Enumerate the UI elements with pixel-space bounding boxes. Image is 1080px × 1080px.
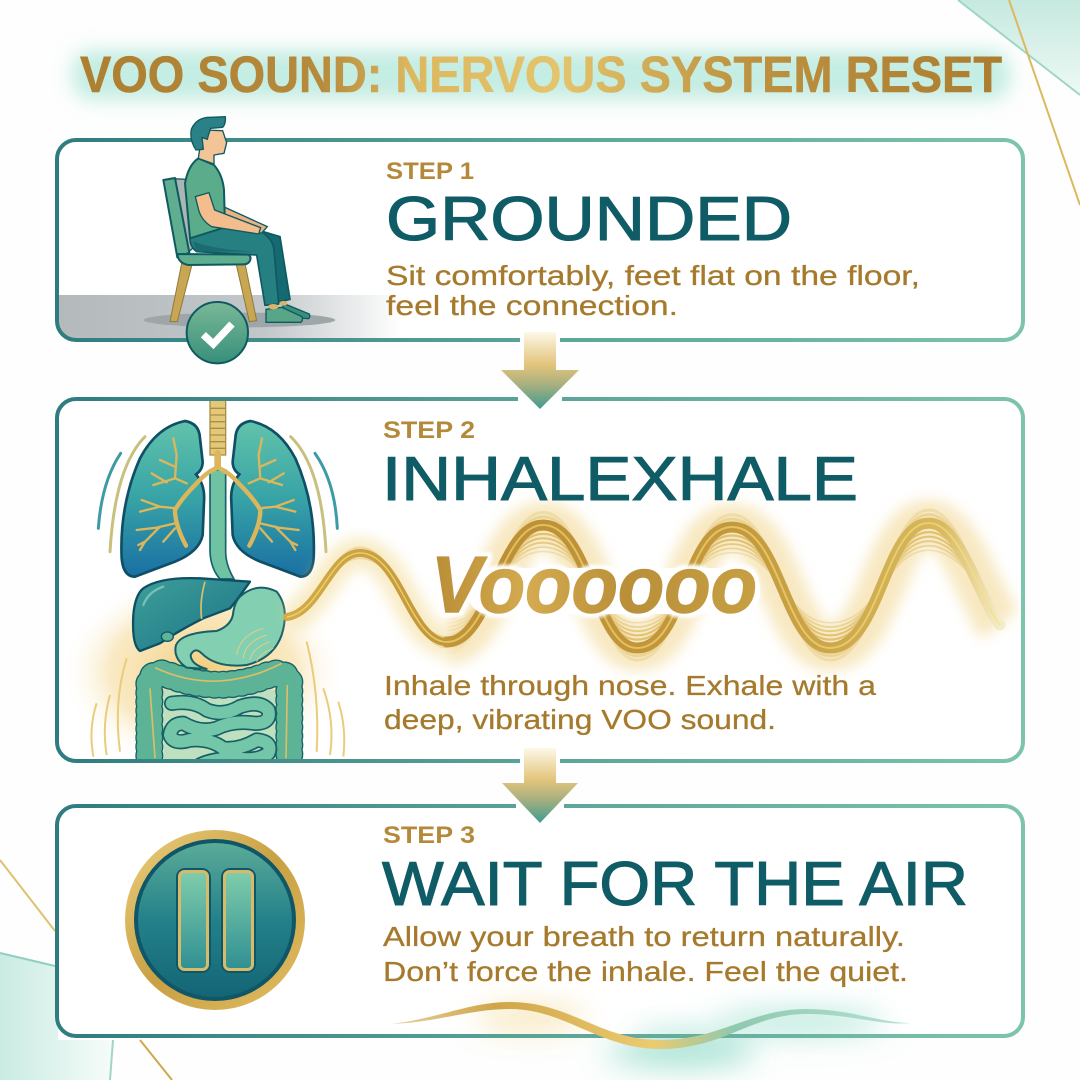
step 2 description: deep, vibrating VOO sound.	[384, 704, 776, 735]
corner decoration: top right	[958, 0, 1080, 205]
esophagus	[210, 470, 234, 579]
step 3 description: Don’t force the inhale. Feel the quiet.	[383, 956, 908, 987]
step 1 description: feel the connection.	[386, 290, 678, 321]
motion arcs	[98, 437, 337, 552]
step 3 description: Allow your breath to return naturally.	[383, 921, 905, 952]
bottom flowing wave	[391, 1002, 911, 1049]
icon: check badge	[187, 302, 248, 363]
icon: pause button	[125, 830, 305, 1010]
step 1 description	[386, 260, 920, 321]
arrow: step 2 to step 3	[502, 748, 578, 823]
colon	[149, 663, 289, 765]
panel: step 3 wait for the air	[57, 806, 1023, 1068]
right lung	[231, 421, 314, 577]
panel: step 1 grounded	[57, 117, 1023, 363]
glow beneath panel	[605, 1036, 755, 1068]
step 1 label: STEP 1	[386, 158, 474, 185]
wave glows	[475, 1007, 885, 1049]
liver	[133, 578, 250, 651]
title: VOO SOUND: NERVOUS SYSTEM RESET	[80, 46, 1002, 103]
step 3 description	[383, 921, 908, 987]
step 3 heading: WAIT FOR THE AIR	[382, 850, 968, 919]
icon: seated person on chair	[143, 117, 335, 363]
left lung	[121, 421, 204, 577]
corner decoration: bottom left	[0, 860, 172, 1080]
step 2 description	[384, 670, 876, 735]
step 3 label: STEP 3	[383, 822, 475, 849]
arrow: step 1 to step 2	[501, 332, 579, 409]
step 2 description: Inhale through nose. Exhale with a	[384, 670, 876, 701]
voooooo text: Voooooo	[431, 540, 757, 629]
stomach	[175, 588, 285, 669]
step 2 label: STEP 2	[383, 417, 475, 444]
step 1 heading: GROUNDED	[386, 185, 792, 254]
step 1 description: Sit comfortably, feet flat on the floor,	[386, 260, 920, 291]
small intestine	[170, 702, 269, 765]
bronchi	[137, 438, 299, 550]
sound wave	[287, 510, 1000, 660]
icon: organs (lungs, liver, stomach, intestines)	[79, 401, 346, 759]
step 2 heading: INHALEXHALE	[382, 445, 858, 514]
panel: step 2 inhale exhale	[57, 399, 1023, 772]
trachea	[210, 400, 226, 455]
floor band	[59, 295, 384, 338]
